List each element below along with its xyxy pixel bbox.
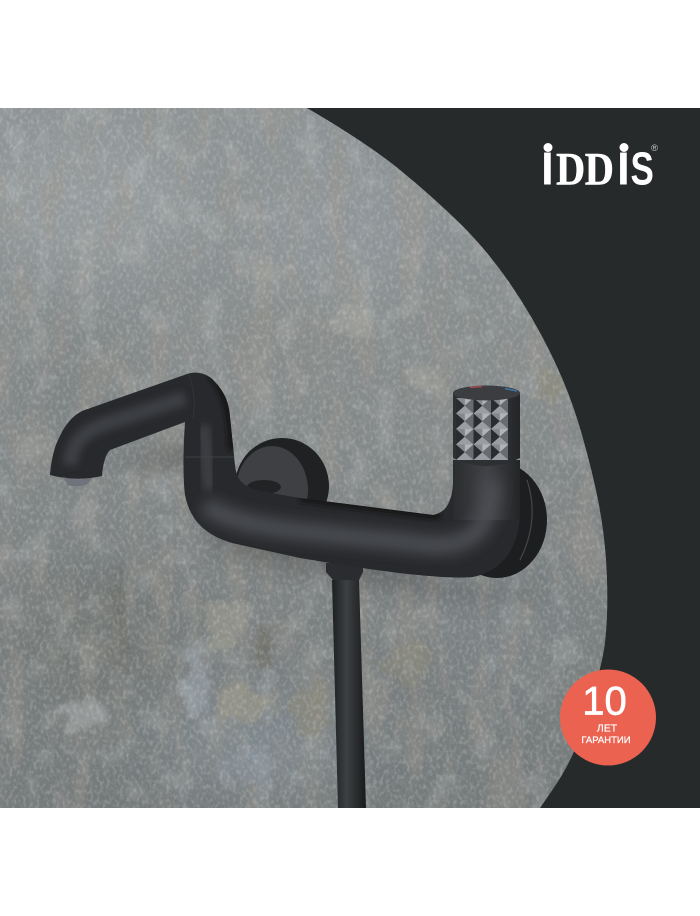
logo wordmark DD: DD [556, 144, 614, 195]
spout nozzle [63, 477, 92, 486]
product poster [0, 108, 700, 808]
logo wordmark: I [617, 142, 630, 194]
warranty number: 10 [582, 680, 627, 724]
right wall plate [447, 462, 547, 578]
knob hot and cold marks [470, 386, 517, 391]
hose [326, 563, 366, 808]
logo wordmark S: S [630, 143, 654, 195]
warranty label line 1: ЛЕТ [597, 722, 618, 734]
warranty badge [560, 670, 656, 766]
logo [541, 142, 658, 195]
logo wordmark: I [541, 142, 554, 194]
faucet body [50, 373, 520, 578]
knob top cap [453, 386, 520, 400]
left wall plate [235, 438, 329, 534]
warranty label line 2: ГАРАНТИИ [581, 735, 631, 746]
dark panel [0, 108, 700, 808]
knob [453, 386, 520, 466]
registered mark: ® [651, 143, 658, 154]
faucet shadow on wall [105, 440, 555, 600]
stone wall [0, 108, 620, 808]
